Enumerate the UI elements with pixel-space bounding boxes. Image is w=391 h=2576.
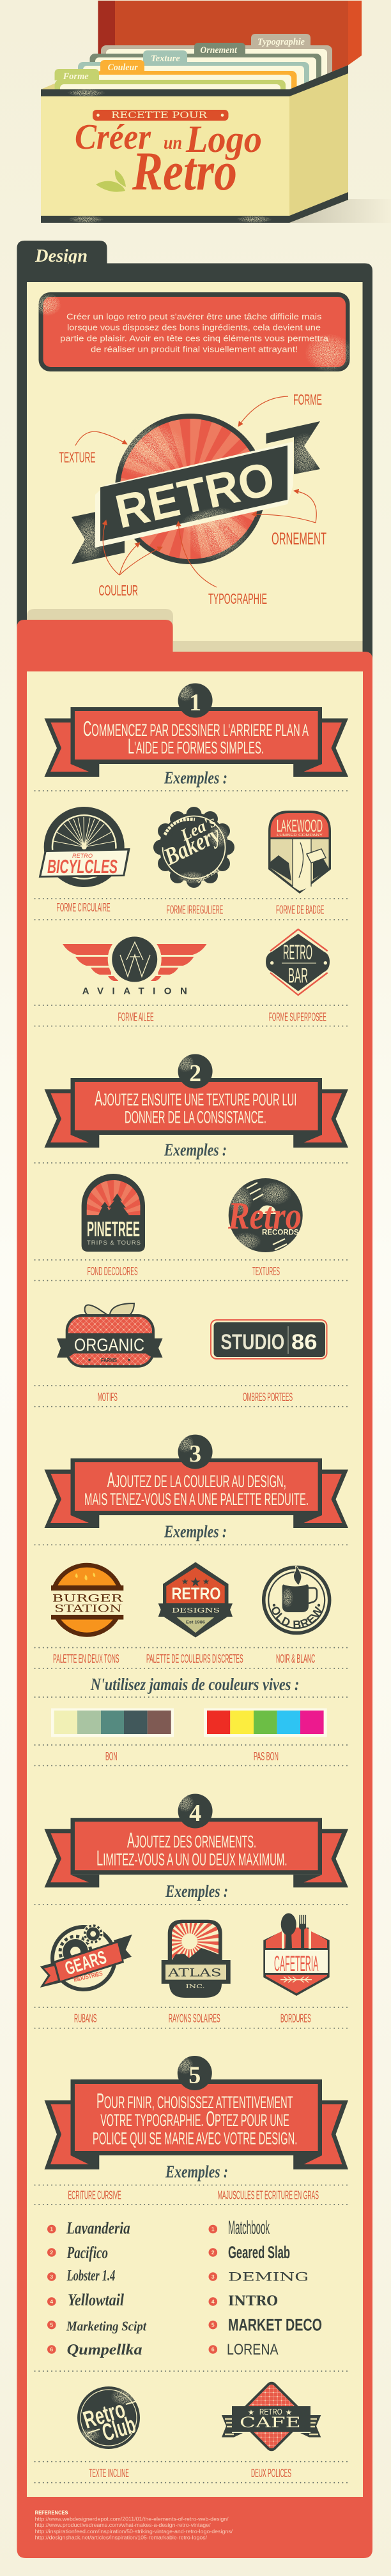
list: bold fonts: 1 bbox=[211, 2226, 215, 2233]
step 2 banner bbox=[45, 1078, 348, 1148]
logo: retro bicycles bbox=[39, 807, 130, 889]
list: cursive fonts: Lavanderia bbox=[66, 2219, 130, 2237]
references: REFERENCES bbox=[35, 2510, 68, 2516]
logo: cafeteria bbox=[263, 1913, 330, 1996]
logo: atlas: INC. bbox=[186, 1984, 205, 1989]
title bbox=[75, 117, 262, 202]
captions row 3: PALETTE EN DEUX TONS bbox=[53, 1652, 119, 1665]
references: http://inspirationfeed.com/inspiration/50-striking-vintage-and-retro-logo-designs/ bbox=[35, 2529, 233, 2535]
examples heading: Exemples : bbox=[164, 768, 227, 788]
captions row 2: FOND DECOLORES bbox=[88, 1265, 138, 1278]
list: cursive fonts: 2 bbox=[50, 2249, 53, 2256]
box back edge bbox=[41, 84, 89, 89]
logo: pinetree bbox=[82, 1174, 145, 1252]
step 2 banner: DONNER DE LA CONSISTANCE. bbox=[125, 1108, 266, 1127]
list: bold fonts: 4 bbox=[211, 2298, 215, 2305]
logo: retro records: RECORDS bbox=[262, 1229, 299, 1237]
box shadow bbox=[289, 199, 391, 223]
callout: intro text: de réaliser un produit final visuellement attrayant! bbox=[91, 345, 298, 354]
examples heading: Exemples : bbox=[165, 1882, 228, 1901]
title: un bbox=[164, 132, 182, 153]
logo: studio 86: STUDIO bbox=[220, 1330, 284, 1354]
box side bbox=[289, 65, 348, 223]
step 4 banner: AJOUTEZ DES ORNEMENTS. bbox=[127, 1828, 256, 1852]
logo: aviation wings: AVIATION bbox=[82, 986, 187, 997]
step 5: DEUX POLICES bbox=[251, 2467, 291, 2480]
logo: retro cafe bbox=[222, 2379, 321, 2453]
step 3 number badge bbox=[176, 1435, 213, 1469]
references: http://www.webdesignerdepot.com/2011/01/the-elements-of-retro-web-design/ bbox=[35, 2516, 229, 2522]
title: Créer bbox=[75, 117, 151, 157]
emblem word: RETRO bbox=[111, 452, 279, 538]
label plate: recette pour: RECETTE POUR bbox=[111, 110, 208, 121]
logo: old brew: OLD BREW bbox=[272, 1606, 322, 1629]
logo: burger station bbox=[50, 1563, 125, 1637]
logo: gears: INDUSTRIES bbox=[73, 1970, 103, 1984]
references: http://designshack.net/articles/inspiration/105-remarkable-retro-logos/ bbox=[35, 2535, 208, 2540]
logo: lea's bakery: Bakery bbox=[160, 821, 225, 871]
step 5 number badge: 5 bbox=[188, 2062, 201, 2088]
callout: intro text: lorsque vous disposez des bons ingrédients, cela devient une bbox=[67, 323, 321, 332]
step 3 bbox=[34, 1435, 348, 1767]
logo: burger station: BURGER bbox=[52, 1592, 123, 1604]
captions row 5 bbox=[89, 2467, 291, 2480]
annotation labels bbox=[59, 391, 326, 607]
icon: leaves bbox=[96, 170, 126, 192]
list: cursive fonts: Yellowtail bbox=[68, 2291, 125, 2309]
step 1 bbox=[35, 683, 348, 1026]
logo: retro cafe: CAFE bbox=[240, 2415, 301, 2431]
logo: lea's bakery: Lea's bbox=[177, 812, 219, 845]
step 1 banner bbox=[45, 707, 348, 777]
emblem circle bbox=[110, 414, 266, 564]
captions row 1 bbox=[57, 901, 326, 1024]
list: bold fonts: 5 bbox=[211, 2322, 215, 2328]
examples heading: Exemples : bbox=[164, 1522, 227, 1541]
logo: retro cafe: ★ bbox=[249, 2409, 254, 2416]
font column captions: ECRITURE CURSIVE bbox=[68, 2189, 121, 2201]
captions row 1: FORME AILEE bbox=[118, 1011, 154, 1024]
logo: gears bbox=[40, 1924, 132, 1989]
heading: vivid colours warning: N'utilisez jamais de couleurs vives : bbox=[90, 1675, 299, 1694]
list: cursive fonts: 3 bbox=[50, 2273, 53, 2280]
logo: burger station: STATION bbox=[54, 1602, 122, 1615]
annotation labels: TYPOGRAPHIE bbox=[208, 590, 267, 607]
captions row 4 bbox=[74, 2012, 311, 2025]
step 5 banner bbox=[45, 2079, 348, 2169]
panel: design bbox=[17, 241, 372, 661]
list: bold fonts: 2 bbox=[211, 2249, 215, 2256]
logo: retro bar: RETRO bbox=[283, 941, 312, 964]
callout: intro text bbox=[33, 292, 353, 372]
font column captions bbox=[68, 2189, 319, 2201]
captions row 4: RAYONS SOLAIRES bbox=[169, 2012, 220, 2025]
annotation labels: COULEUR bbox=[98, 582, 138, 599]
card tab: ornement bbox=[89, 43, 321, 109]
logo: retro designs: DESIGNS bbox=[172, 1606, 220, 1614]
captions row 1: FORME IRREGULIERE bbox=[167, 904, 223, 917]
panel: steps bbox=[17, 609, 372, 2558]
list: cursive fonts: 6 bbox=[50, 2346, 53, 2353]
list: cursive fonts: Lobster 1.4 bbox=[66, 2268, 115, 2284]
captions row 2: MOTIFS bbox=[98, 1391, 118, 1404]
palette captions bbox=[105, 1750, 279, 1763]
list: cursive fonts: 1 bbox=[50, 2226, 53, 2233]
logo: retro cafe: RETRO bbox=[259, 2407, 282, 2416]
callout: intro text: Créer un logo retro peut s'avérer être une tâche difficile mais bbox=[66, 313, 322, 322]
card tab: ornement: Ornement bbox=[200, 45, 238, 56]
logo: aviation wings bbox=[63, 932, 206, 997]
step 1: FORME SUPERPOSEE bbox=[269, 1011, 326, 1024]
logo: retro bicycles: RETRO bbox=[72, 853, 93, 859]
step 4 banner bbox=[45, 1818, 348, 1887]
step 4 number badge bbox=[176, 1793, 213, 1828]
step 3: NOIR & BLANC bbox=[276, 1652, 315, 1665]
emblem: retro logo bbox=[72, 414, 322, 564]
list: bold fonts: MARKET DECO bbox=[228, 2316, 322, 2335]
captions row 2 bbox=[88, 1265, 293, 1404]
tab: design bbox=[17, 241, 107, 287]
step 2 bbox=[35, 1054, 348, 1407]
step 1 number badge: 1 bbox=[189, 689, 201, 716]
annotation labels: TEXTURE bbox=[59, 449, 96, 466]
step 5 number badge bbox=[176, 2056, 212, 2090]
step 3: PAS BON bbox=[254, 1750, 279, 1763]
step 1 number badge bbox=[176, 683, 213, 717]
logo: retro club bbox=[77, 2386, 140, 2449]
palette: pas bon bbox=[204, 1708, 327, 1737]
logo: lakewood: LAKEWOOD bbox=[277, 816, 323, 835]
annotation labels: ORNEMENT bbox=[272, 529, 326, 548]
examples heading: Exemples : bbox=[164, 1140, 227, 1159]
references: http://www.productivedreams.com/what-makes-a-design-retro-vintage/ bbox=[35, 2522, 211, 2528]
card tab: forme bbox=[55, 69, 286, 112]
palette: bon bbox=[51, 1708, 174, 1737]
logo: retro club: Club bbox=[99, 2411, 139, 2447]
step 5 banner: VOTRE TYPOGRAPHIE. OPTEZ POUR UNE bbox=[100, 2107, 289, 2130]
logo: retro records bbox=[227, 1178, 303, 1252]
logo: retro club: Retro bbox=[80, 2396, 128, 2434]
logo: lea's bakery bbox=[151, 805, 236, 890]
list: cursive fonts: 5 bbox=[50, 2322, 53, 2328]
tab: design: Design bbox=[34, 246, 88, 266]
list: bold fonts: LORENA bbox=[227, 2341, 279, 2358]
step 1: FORME DE BADGE bbox=[276, 904, 325, 917]
card tab: forme: Forme bbox=[63, 71, 89, 82]
list: bold fonts: INTRO bbox=[228, 2293, 278, 2309]
box front bbox=[41, 89, 289, 223]
logo: retro designs bbox=[158, 1562, 233, 1637]
list: cursive fonts: 4 bbox=[50, 2298, 53, 2305]
logo: pinetree: TRIPS & TOURS bbox=[87, 1239, 141, 1247]
card tab: typographie bbox=[101, 34, 332, 100]
logo: pinetree: PINETREE bbox=[87, 1217, 140, 1241]
logo: studio 86: 86 bbox=[291, 1330, 317, 1354]
card tab: texture bbox=[78, 50, 309, 117]
step 4: BORDURES bbox=[280, 2012, 311, 2025]
annotation labels: FORME bbox=[293, 391, 322, 408]
list: bold fonts: 6 bbox=[211, 2346, 215, 2353]
recipe card box header bbox=[41, 1, 391, 223]
list: cursive fonts: Pacifico bbox=[66, 2243, 108, 2262]
ribbon banner bbox=[100, 446, 288, 541]
captions row 3 bbox=[53, 1652, 315, 1665]
ribbon tails bbox=[72, 421, 322, 564]
logo: organic: FARMS bbox=[101, 1358, 118, 1363]
card tab: typographie: Typographie bbox=[257, 37, 305, 47]
annotation arrows bbox=[75, 396, 316, 587]
step 3 number badge: 3 bbox=[189, 1441, 201, 1467]
references bbox=[35, 2510, 233, 2540]
logo: retro bar: BAR bbox=[288, 964, 308, 987]
logo: lea's bakery: SINCE 1984 bbox=[197, 868, 220, 885]
list: bold fonts: DEMING bbox=[228, 2270, 309, 2284]
logo: gears: GEARS bbox=[63, 1947, 109, 1979]
step 3 banner bbox=[45, 1458, 348, 1528]
palette captions: BON bbox=[105, 1750, 118, 1763]
logo: retro designs: RETRO bbox=[171, 1584, 221, 1603]
examples heading: Exemples : bbox=[165, 2162, 228, 2181]
card tab: couleur: Couleur bbox=[108, 63, 138, 73]
title: Retro bbox=[132, 140, 237, 202]
logo: retro designs: Est 1986 bbox=[186, 1620, 205, 1624]
logo: organic: ORGANIC bbox=[74, 1335, 144, 1354]
list: bold fonts: 3 bbox=[211, 2273, 215, 2280]
box lid bbox=[98, 1, 362, 77]
label plate: recette pour bbox=[93, 110, 229, 121]
logo: lakewood: LUMBER COMPANY bbox=[277, 834, 323, 837]
captions row 1: FORME CIRCULAIRE bbox=[57, 901, 111, 914]
step 2 number badge: 2 bbox=[189, 1060, 201, 1087]
captions row 2: TEXTURES bbox=[252, 1265, 280, 1278]
step 2 number badge bbox=[176, 1054, 213, 1089]
captions row 5: TEXTE INCLINE bbox=[89, 2467, 129, 2480]
logo: retro cafe: ★ bbox=[286, 2409, 292, 2416]
list: cursive fonts bbox=[47, 2219, 147, 2358]
list: cursive fonts: Marketing Scipt bbox=[66, 2318, 147, 2333]
logo: lakewood bbox=[268, 811, 331, 894]
callout: intro text: partie de plaisir. Avoir en tête ces cinq éléments vous permettra bbox=[60, 334, 328, 343]
logo: retro bar bbox=[266, 929, 330, 995]
step 2: OMBRES PORTEES bbox=[243, 1391, 293, 1404]
card tab: couleur bbox=[96, 60, 296, 113]
logo: atlas: ATLAS bbox=[167, 1967, 222, 1980]
logo: retro records: Retro bbox=[227, 1195, 302, 1237]
list: cursive fonts: Qumpellka bbox=[67, 2342, 142, 2358]
logo: organic bbox=[57, 1303, 162, 1368]
logo: old brew bbox=[262, 1565, 331, 1635]
list: bold fonts: Matchbook bbox=[228, 2217, 270, 2238]
captions row 4: RUBANS bbox=[74, 2012, 96, 2025]
list: bold fonts bbox=[208, 2217, 322, 2358]
step 4 number badge: 4 bbox=[189, 1800, 201, 1827]
card tab: texture: Texture bbox=[151, 54, 180, 64]
logo: studio 86 bbox=[210, 1319, 327, 1359]
step 4 bbox=[35, 1793, 348, 2028]
logo: retro bicycles: BICYLCLES bbox=[47, 855, 118, 878]
step 1 banner: L'AIDE DE FORMES SIMPLES. bbox=[128, 735, 264, 758]
list: bold fonts: Geared Slab bbox=[228, 2243, 290, 2262]
captions row 3: PALETTE DE COULEURS DISCRETES bbox=[146, 1652, 243, 1665]
title: Logo bbox=[185, 118, 262, 160]
step 5 bbox=[35, 2056, 348, 2483]
logo: atlas bbox=[162, 1919, 231, 1998]
